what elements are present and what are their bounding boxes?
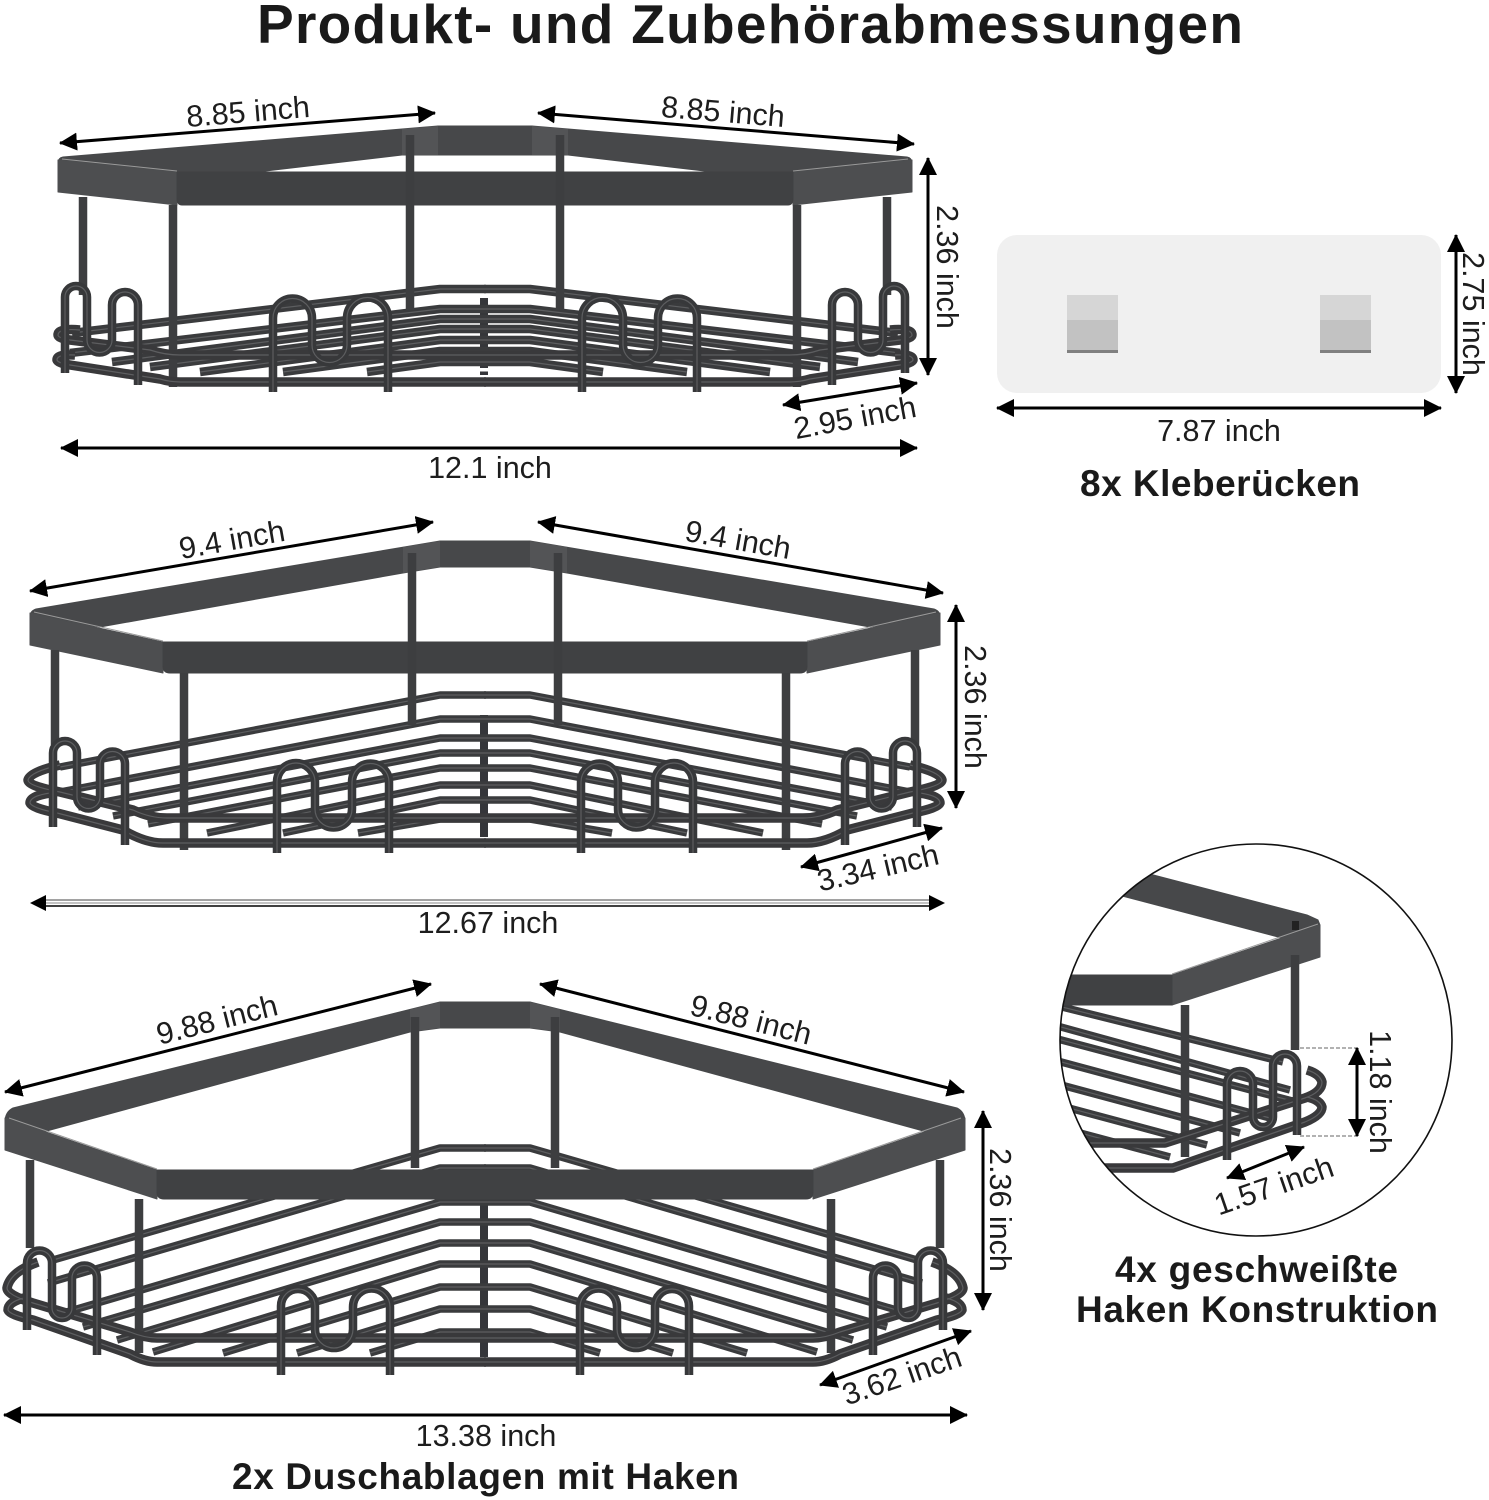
adhesive plate hook right [1320, 295, 1371, 353]
panel: hook construction detail circle [1059, 843, 1453, 1237]
caption: welded hook construction [1076, 1249, 1438, 1330]
adhesive plate hook left [1067, 295, 1118, 353]
dimension: small shelf left edge 8.85 inch: 8.85 inch [185, 90, 311, 134]
dimension: large shelf left edge 9.88 inch [5, 984, 431, 1092]
caption: shower shelves with hooks: 2x Duschablagen mit Haken [232, 1456, 739, 1497]
dimension: large shelf width 13.38 inch: 13.38 inch [416, 1419, 556, 1453]
panel: small corner shelf [57, 126, 913, 392]
left half of small shelf [57, 126, 486, 392]
left half of medium shelf [28, 541, 486, 853]
dashed guide lines [1300, 1048, 1358, 1136]
dimension: hook height 1.18 inch: 1.18 inch [1363, 1030, 1397, 1154]
panel: large corner shelf [5, 1002, 965, 1375]
panel: adhesive plate [997, 235, 1441, 393]
dimension: large shelf height 2.36 inch: 2.36 inch [983, 1148, 1017, 1272]
center support rod, large shelf [480, 1203, 488, 1357]
dimension: plate height 2.75 inch: 2.75 inch [1456, 252, 1489, 376]
detail circle outline [1060, 844, 1452, 1236]
caption: adhesive backs: 8x Kleberücken [1080, 463, 1360, 504]
right half of small shelf [484, 126, 913, 392]
dimension: large shelf left edge 9.88 inch: 9.88 inch [153, 988, 281, 1052]
dimension: small shelf right edge 8.85 inch [538, 90, 914, 144]
dimension: large shelf depth 3.62 inch: 3.62 inch [838, 1340, 966, 1412]
dimension: small shelf height 2.36 inch: 2.36 inch [930, 205, 964, 329]
detail circle contents [1060, 874, 1327, 1173]
dimension: medium shelf width 12.67 inch: 12.67 inch [418, 906, 558, 940]
dimension: large shelf right edge 9.88 inch: 9.88 inch [687, 988, 815, 1052]
dimension: small shelf left edge 8.85 inch [60, 90, 435, 143]
dimension: small shelf width 12.1 inch: 12.1 inch [428, 451, 552, 485]
dimension: medium shelf width 12.67 inch [30, 895, 945, 940]
dimension: medium shelf left edge 9.4 inch [30, 514, 433, 591]
dimension: plate width 7.87 inch: 7.87 inch [1157, 414, 1281, 448]
caption: welded hook construction: Haken Konstruktion [1076, 1289, 1438, 1330]
caption: welded hook construction: 4x geschweißte [1115, 1249, 1398, 1290]
dimension: small shelf right edge 8.85 inch: 8.85 inch [660, 90, 786, 134]
dimension: small shelf depth 2.95 inch: 2.95 inch [791, 390, 919, 446]
dimension: medium shelf right edge 9.4 inch: 9.4 inch [682, 514, 794, 566]
right half of medium shelf [484, 541, 942, 853]
dimension: medium shelf right edge 9.4 inch [538, 514, 943, 593]
dimension: medium shelf height 2.36 inch: 2.36 inch [958, 645, 992, 769]
dimension: hook width 1.57 inch: 1.57 inch [1210, 1150, 1338, 1222]
dimension: medium shelf depth 3.34 inch: 3.34 inch [814, 838, 942, 898]
panel: medium corner shelf [28, 541, 942, 853]
dimension: medium shelf left edge 9.4 inch: 9.4 inch [176, 514, 288, 566]
dimension: large shelf right edge 9.88 inch [540, 984, 964, 1092]
right half of large shelf [484, 1002, 965, 1375]
adhesive plate body [997, 235, 1441, 393]
left half of large shelf [5, 1002, 486, 1375]
center support rod, medium shelf [480, 715, 488, 837]
center support rod, small shelf [480, 298, 488, 375]
